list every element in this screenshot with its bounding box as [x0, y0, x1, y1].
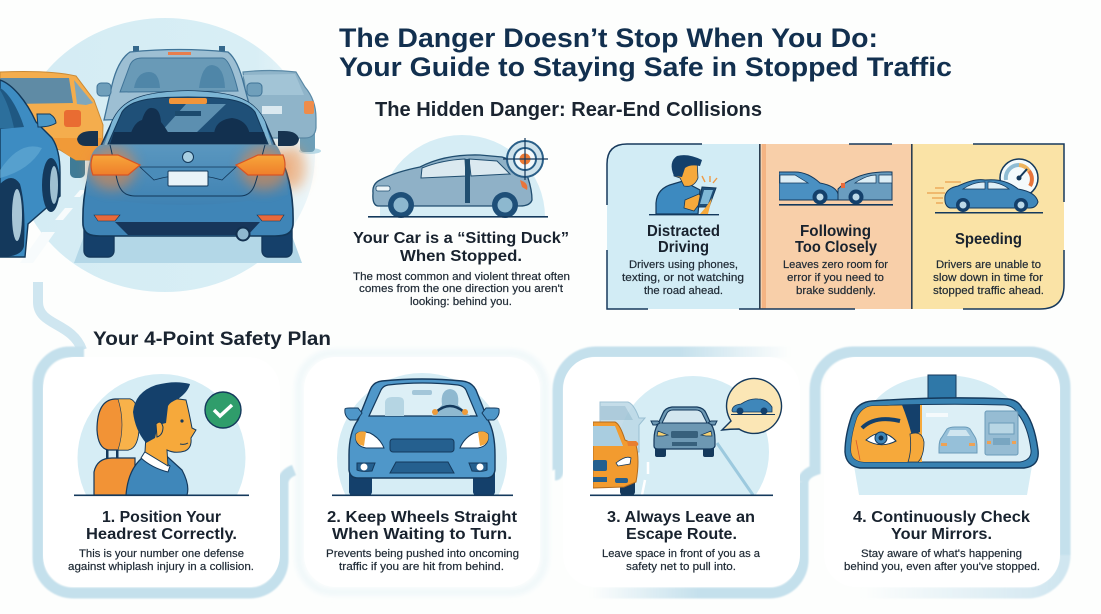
distracted driving heading: Distracted	[647, 223, 720, 240]
title: The Danger Doesn’t Stop When You Do:	[339, 23, 878, 53]
heading: sitting duck: When Stopped.	[400, 248, 522, 265]
following too closely heading: Too Closely	[795, 239, 877, 256]
icon: car front view	[332, 373, 513, 496]
card 2 heading	[327, 509, 518, 543]
following too closely text: error if you need to	[787, 272, 884, 284]
heading: sitting duck: Your Car is a “Sitting Duck”	[353, 230, 569, 247]
card 3 heading	[607, 509, 755, 543]
icon: rear-view mirror	[845, 375, 1038, 495]
faded back car	[600, 402, 645, 452]
icon: targeted car	[368, 135, 548, 218]
card 2: wheels straight	[326, 373, 518, 573]
cause: distracted driving	[622, 155, 744, 297]
card 3 text: safety net to pull into.	[626, 561, 736, 573]
speeding text: Drivers are unable to	[936, 259, 1041, 271]
card 2 heading: 2. Keep Wheels Straight	[327, 509, 518, 526]
following too closely heading	[795, 223, 877, 256]
heading: sitting duck	[353, 230, 569, 265]
card 4 heading: 4. Continuously Check	[853, 509, 1030, 526]
right background car	[243, 70, 321, 154]
distracted driving text: texting, or not watching	[622, 272, 744, 284]
sitting duck block	[353, 135, 570, 308]
distracted driving heading	[647, 223, 720, 256]
centre background car	[97, 46, 262, 120]
panel: causes of rear-end collisions	[607, 144, 1064, 309]
speeding heading: Speeding	[955, 231, 1022, 248]
cause: following too closely	[778, 172, 893, 297]
heading: 4-point safety plan: Your 4-Point Safety Plan	[93, 328, 331, 350]
card 2 text: traffic if you are hit from behind.	[339, 561, 504, 573]
distracted driving text: Drivers using phones,	[629, 259, 738, 271]
card 1 text: This is your number one defense	[79, 548, 244, 560]
card 1 heading: Headrest Correctly.	[86, 526, 237, 543]
card 4 text: behind you, even after you've stopped.	[844, 561, 1040, 573]
card 4 text: Stay aware of what's happening	[861, 548, 1022, 560]
title: Your Guide to Staying Safe in Stopped Traffic	[339, 52, 952, 82]
card 1 text: against whiplash injury in a collision.	[68, 561, 254, 573]
left side blue car	[0, 80, 60, 257]
cause: speeding	[927, 159, 1044, 297]
card 2 text: Prevents being pushed into oncoming	[326, 548, 519, 560]
card 1: headrest	[43, 357, 280, 587]
distracted driving text	[622, 259, 744, 297]
title	[339, 23, 952, 82]
orange car	[593, 422, 638, 495]
icon: road with escape space	[590, 376, 782, 496]
following too closely text: Leaves zero room for	[783, 259, 888, 271]
following too closely heading: Following	[800, 223, 871, 240]
icon: person on phone	[649, 155, 719, 215]
sitting duck text: The most common and violent threat often	[353, 271, 570, 283]
sitting duck text: comes from the one direction you aren't	[359, 283, 563, 295]
following too closely text	[783, 259, 888, 297]
speeding text: slow down in time for	[933, 272, 1043, 284]
icon: speeding car with gauge	[927, 159, 1043, 214]
card 3 heading: 3. Always Leave an	[607, 509, 755, 526]
card 4 heading	[853, 509, 1030, 543]
card 3 text	[602, 548, 761, 573]
distracted driving text: the road ahead.	[644, 285, 723, 297]
distracted driving heading: Driving	[658, 239, 709, 256]
grey car	[651, 407, 717, 457]
speech bubble with car	[722, 378, 782, 433]
following too closely text: brake suddenly.	[796, 285, 876, 297]
safety plan frame bands	[38, 352, 1065, 593]
icon: two cars colliding	[778, 172, 893, 206]
icon: person with headrest and check	[74, 374, 249, 496]
speeding text	[933, 259, 1044, 297]
card 3 text: Leave space in front of you as a	[602, 548, 761, 560]
speeding text: stopped traffic ahead.	[933, 285, 1044, 297]
main blue car with lit brake lights	[74, 91, 306, 263]
card 4 text	[844, 548, 1040, 573]
yellow car	[0, 72, 103, 178]
card 2 text	[326, 548, 519, 573]
sitting duck text	[353, 271, 570, 308]
card 3: escape route	[563, 357, 800, 587]
card 4: mirrors	[824, 357, 1060, 587]
card 1 heading	[86, 509, 237, 543]
card 1 heading: 1. Position Your	[102, 509, 221, 526]
hero illustration: stopped traffic from behind	[0, 18, 321, 350]
card 1 text	[68, 548, 254, 573]
card 2 heading: When Waiting to Turn.	[332, 526, 512, 543]
sitting duck text: looking: behind you.	[410, 296, 512, 308]
heading: hidden danger: The Hidden Danger: Rear-End Collisions	[375, 99, 762, 121]
card 4 heading: Your Mirrors.	[891, 526, 992, 543]
card 3 heading: Escape Route.	[626, 526, 737, 543]
